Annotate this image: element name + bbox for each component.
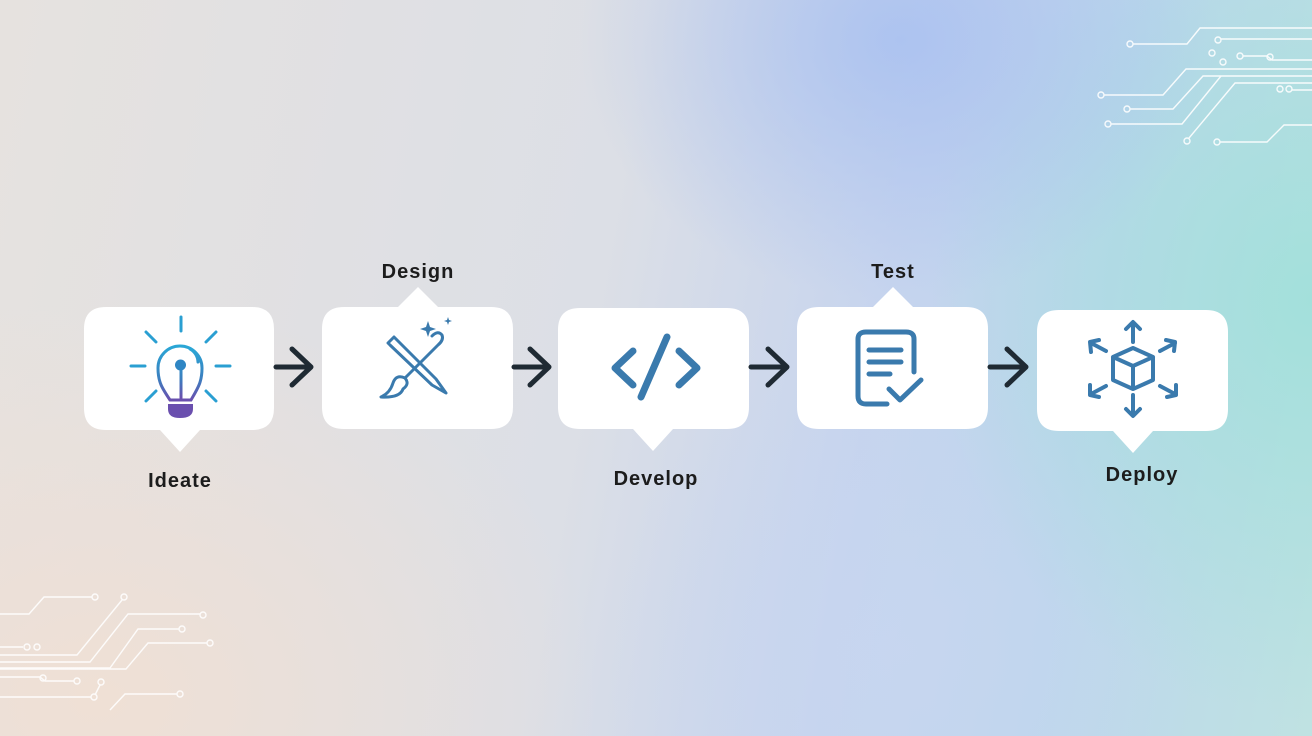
icon: pencil and brush	[381, 333, 446, 397]
arrow 1	[276, 349, 311, 385]
label: Deploy: Deploy	[1106, 464, 1178, 486]
arrow 3	[751, 349, 787, 385]
step: Ideate	[84, 307, 274, 492]
circuit: top right	[1098, 28, 1312, 145]
icon: checklist document	[858, 332, 921, 404]
label: Ideate: Ideate	[148, 470, 212, 492]
icon: code	[615, 337, 697, 397]
arrow 2	[514, 349, 549, 385]
step: Test	[797, 261, 988, 429]
circuit: bottom left	[0, 594, 213, 710]
step: Design	[322, 261, 513, 429]
step: Deploy	[1037, 310, 1228, 486]
arrow 4	[990, 349, 1026, 385]
label: Develop: Develop	[614, 468, 698, 490]
icon: cube with arrows	[1090, 322, 1176, 416]
label: Design: Design	[382, 261, 454, 283]
label: Test: Test	[871, 261, 915, 283]
step: Develop	[558, 308, 749, 490]
icon: lightbulb	[131, 317, 230, 401]
